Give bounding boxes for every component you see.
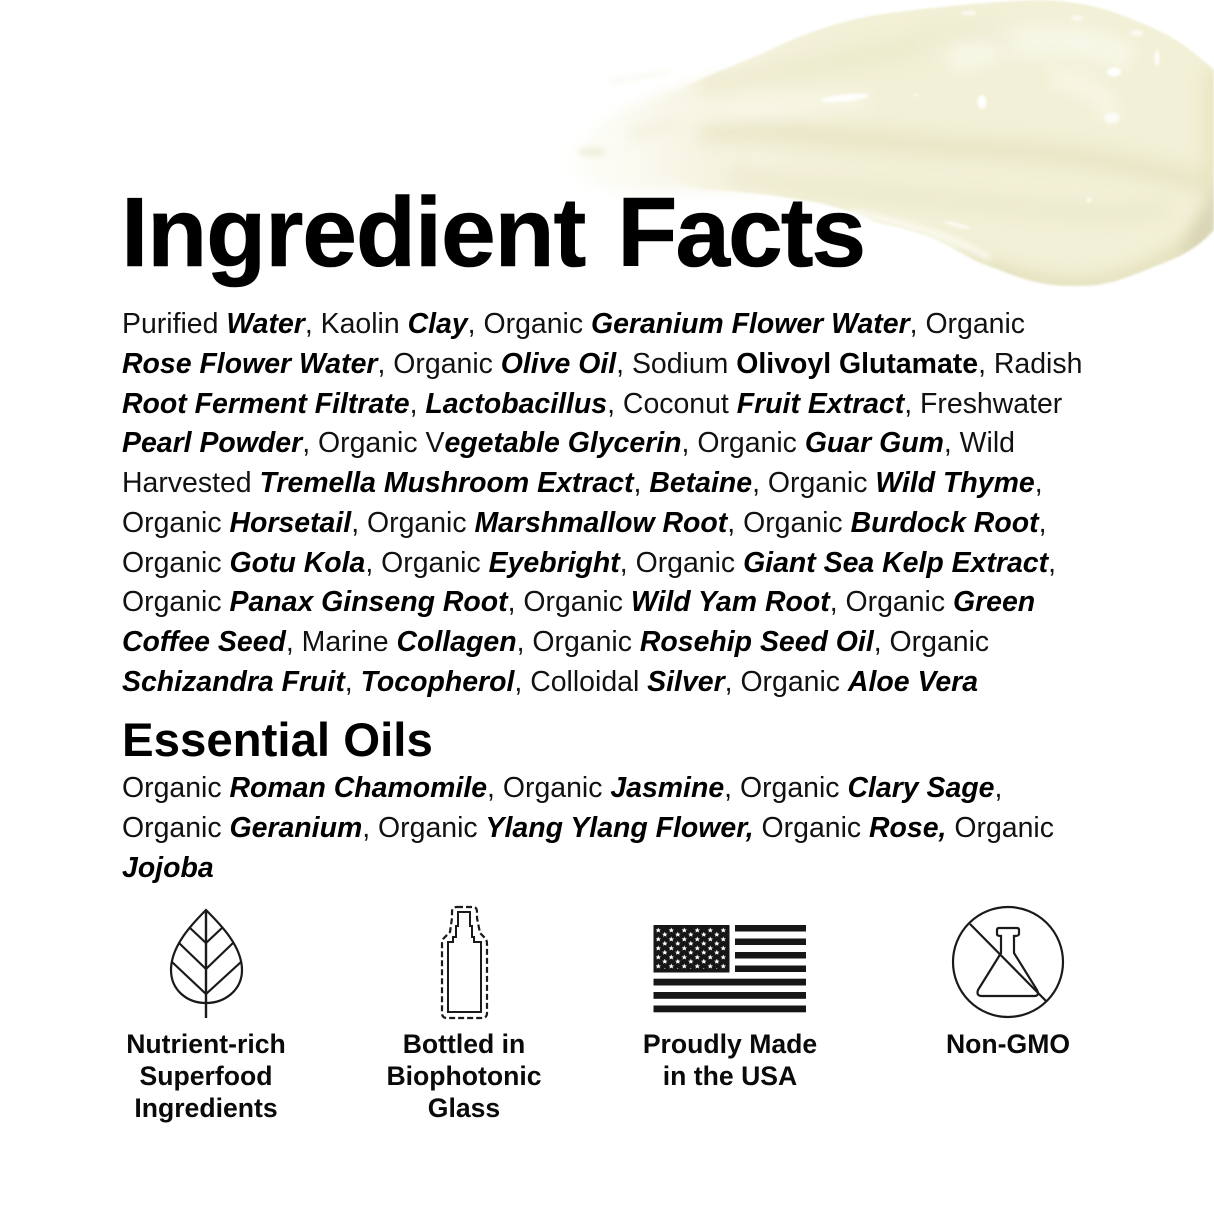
label: biophotonic glass: Bottled in — [403, 1029, 525, 1059]
essential oils list — [122, 772, 1054, 884]
label: biophotonic glass — [386, 1029, 542, 1123]
ingredient list: Root Ferment Filtrate, Lactobacillus, Coconut Fruit Extract, Freshwater — [122, 388, 1062, 420]
ingredient list: Organic Panax Ginseng Root, Organic Wild Yam Root, Organic Green — [122, 586, 1035, 618]
ingredient list: Rose Flower Water, Organic Olive Oil, Sodium Olivoyl Glutamate, Radish — [122, 348, 1082, 380]
label: nutrient-rich: Ingredients — [134, 1093, 278, 1123]
cream swatch — [576, 0, 1214, 287]
icon: bottle — [440, 906, 488, 1020]
label: non-GMO: Non-GMO — [946, 1029, 1070, 1059]
creases and shadows — [701, 62, 797, 92]
faint tail — [564, 72, 760, 191]
ingredient list: Organic Gotu Kola, Organic Eyebright, Organic Giant Sea Kelp Extract, — [122, 546, 1056, 578]
essential oils list: Jojoba — [122, 852, 214, 884]
essential oils list: Organic Roman Chamomile, Organic Jasmine, Organic Clary Sage, — [122, 772, 1002, 804]
highlights — [821, 10, 1160, 230]
label: biophotonic glass: Glass — [428, 1093, 500, 1123]
ingredient list — [122, 308, 1082, 698]
icon: leaf — [170, 908, 244, 1018]
label: made in USA — [643, 1029, 817, 1091]
label: nutrient-rich: Superfood — [140, 1061, 272, 1091]
label: made in USA: in the USA — [663, 1061, 797, 1091]
icon: american flag — [654, 925, 806, 1012]
essential oils list: Organic Geranium, Organic Ylang Ylang Flower, Organic Rose, Organic — [122, 812, 1054, 844]
title: Ingredient Facts — [121, 176, 864, 286]
label: nutrient-rich — [126, 1029, 286, 1123]
ingredient list: Pearl Powder, Organic Vegetable Glycerin, Organic Guar Gum, Wild — [122, 427, 1015, 459]
ingredient list: Purified Water, Kaolin Clay, Organic Geranium Flower Water, Organic — [122, 308, 1025, 340]
ingredient list: Organic Horsetail, Organic Marshmallow Root, Organic Burdock Root, — [122, 507, 1046, 539]
label: nutrient-rich: Nutrient-rich — [126, 1029, 286, 1059]
ingredient list: Coffee Seed, Marine Collagen, Organic Rosehip Seed Oil, Organic — [122, 626, 989, 658]
ingredient list: Schizandra Fruit, Tocopherol, Colloidal Silver, Organic Aloe Vera — [122, 666, 978, 698]
icon: non-GMO flask — [952, 906, 1064, 1018]
label: made in USA: Proudly Made — [643, 1029, 817, 1059]
heading: essential oils: Essential Oils — [122, 714, 433, 766]
label: biophotonic glass: Biophotonic — [386, 1061, 542, 1091]
ingredient list: Harvested Tremella Mushroom Extract, Betaine, Organic Wild Thyme, — [122, 467, 1043, 499]
